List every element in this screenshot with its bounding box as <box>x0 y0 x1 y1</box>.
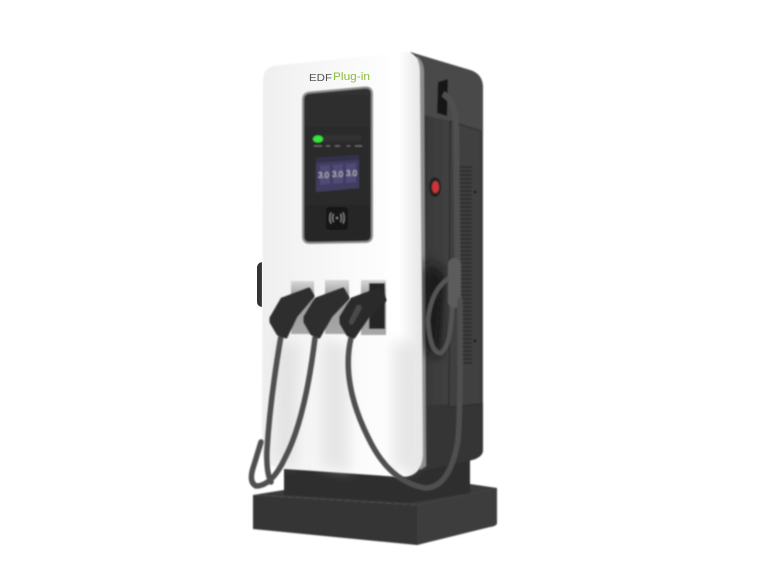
handle 2 <box>305 289 348 337</box>
status labels <box>314 145 362 147</box>
cables <box>251 300 460 488</box>
side door <box>449 121 481 407</box>
third socket interior <box>369 283 385 329</box>
shadow behind cable loop <box>424 262 445 356</box>
charging handles <box>271 289 385 337</box>
cable 3 joining side cable <box>348 300 460 488</box>
display bezel <box>303 87 372 243</box>
base slab <box>253 484 497 545</box>
connector sockets <box>291 280 386 335</box>
logo: Plug-in <box>333 71 370 83</box>
screws <box>474 191 476 193</box>
cable loop <box>428 278 452 353</box>
side cable upper <box>443 94 458 300</box>
side holster <box>437 79 448 116</box>
side top band <box>412 53 483 132</box>
panel shading <box>275 340 415 472</box>
handle 1 <box>271 289 313 337</box>
pedestal <box>284 458 470 503</box>
side grip on left <box>257 262 262 307</box>
RFID reader <box>326 207 348 230</box>
side bottom band <box>426 403 483 470</box>
cable 2 with left loop <box>251 338 315 486</box>
status LED <box>313 136 323 142</box>
vent slats <box>459 167 472 363</box>
touch screen <box>316 155 359 192</box>
handle 3 grip <box>349 305 362 325</box>
side strip <box>417 56 426 470</box>
touch screen: 3.0 <box>318 171 330 180</box>
front panel <box>262 52 423 477</box>
touch screen: 3.0 <box>346 169 358 178</box>
side panel <box>410 52 483 470</box>
handle 3 <box>341 289 385 337</box>
logo: EDF <box>309 72 332 84</box>
cable 1 <box>267 336 281 482</box>
touch screen: 3.0 <box>332 170 344 179</box>
emergency stop button <box>429 177 441 197</box>
logo <box>309 71 370 84</box>
cable holder <box>448 258 461 308</box>
